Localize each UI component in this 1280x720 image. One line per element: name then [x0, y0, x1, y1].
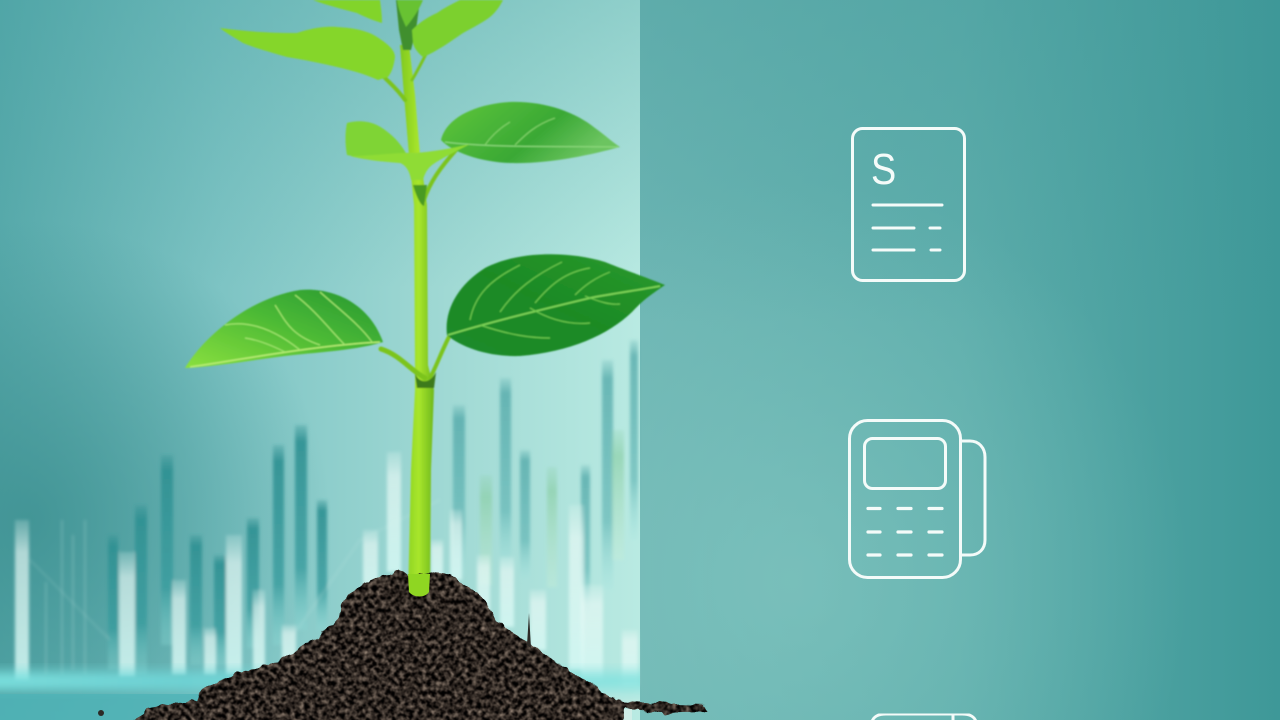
terminal card slot [961, 441, 985, 555]
bar chart: translucent market bars [15, 340, 638, 685]
root stick [527, 613, 531, 648]
panel: left light background [0, 0, 640, 720]
teal bars on the right [453, 340, 638, 615]
illustration: seedling [185, 0, 665, 598]
leaf: middle left small with bract [346, 121, 470, 180]
terminal screen [864, 438, 946, 488]
invoice currency letter: S [871, 144, 896, 194]
leaf: upper right [412, 0, 503, 57]
soil spill highlight [624, 709, 632, 720]
invoice lines [873, 205, 942, 250]
leaf: lower right [447, 254, 665, 356]
green bars [480, 430, 624, 587]
panel: right teal background [640, 0, 1280, 720]
soil clod [98, 710, 104, 716]
stem base in soil [408, 574, 430, 596]
thin chart lines [30, 500, 440, 675]
dark teal bars on the left [108, 425, 327, 675]
main stem [400, 45, 434, 598]
floor glow [0, 672, 660, 720]
leaf: upper left [220, 27, 395, 80]
leaf: middle right [441, 102, 620, 163]
stem top dark cluster [396, 0, 420, 50]
leaf: lower left [185, 290, 383, 368]
icon: partially cropped third icon [872, 714, 976, 720]
stem branches [381, 52, 456, 378]
terminal keypad [868, 508, 942, 555]
leaf: top centre [397, 0, 423, 27]
white bars [15, 452, 638, 685]
leaf: top left [313, 0, 382, 23]
icon: invoice document [852, 128, 964, 280]
node joint dark [415, 372, 436, 388]
illustration: soil mound [98, 570, 707, 720]
icon: card payment terminal [850, 420, 985, 578]
